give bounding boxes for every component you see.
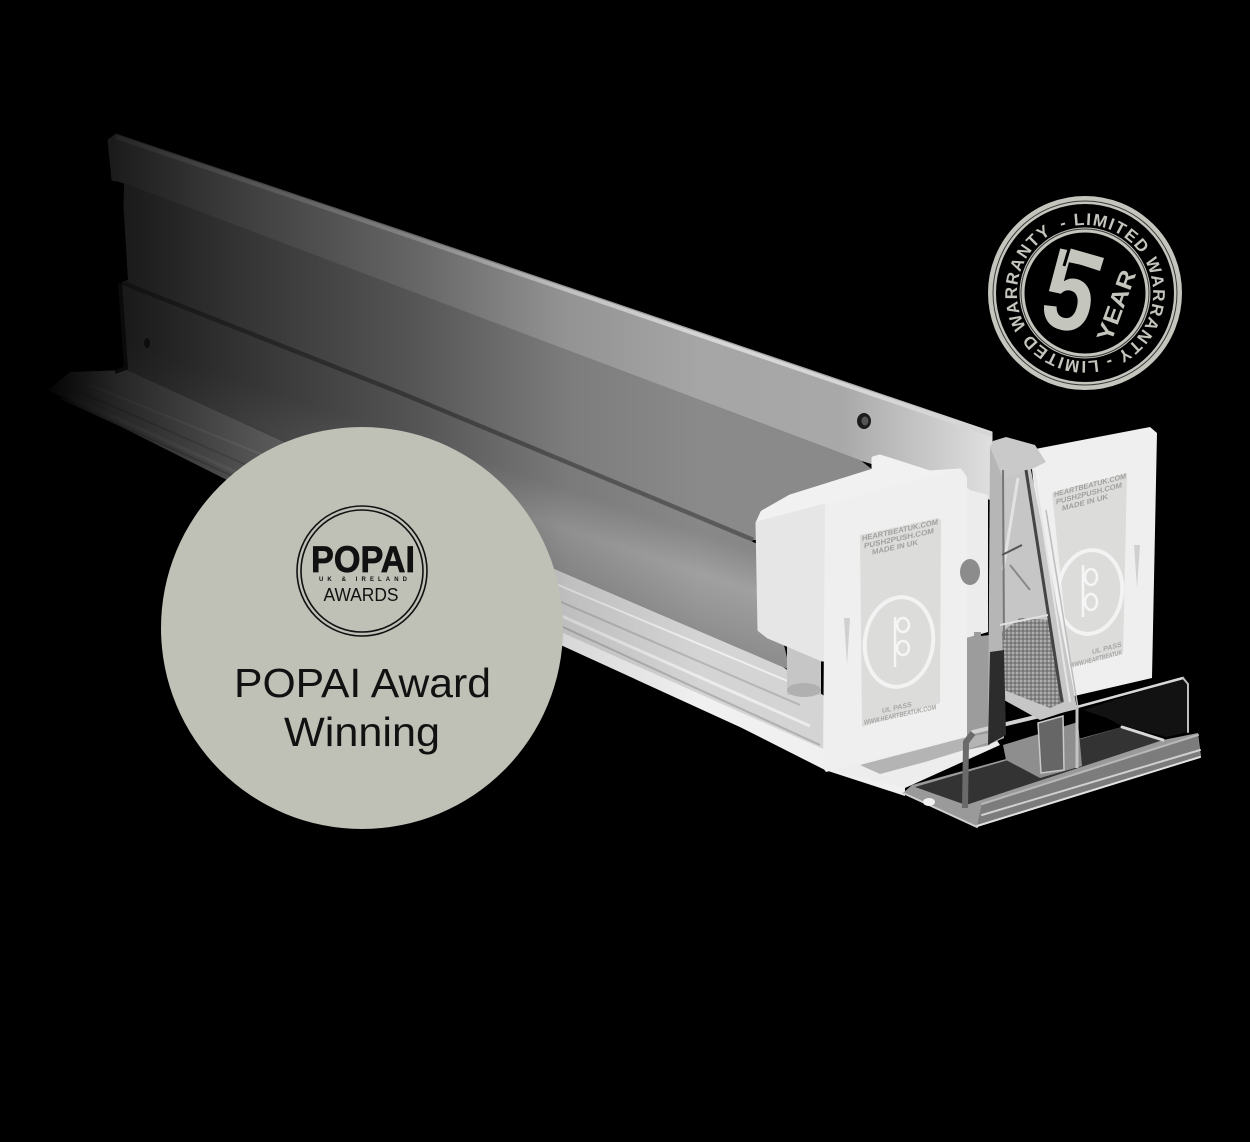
right panel printed text bottom [1070,640,1123,670]
right panel printed text top: HEARTBEATUK.COM [1054,471,1126,499]
logo outer ring [297,506,427,636]
tray rails [903,678,1200,827]
right panel printed text top: MADE IN UK [1062,492,1109,513]
rail back strip [108,134,992,500]
clear tray [903,678,1201,827]
rail channel shadow line [122,283,753,540]
left panel circle logo [859,593,939,691]
tray outer body [903,727,1201,827]
right panel printed text bottom: WWW.HEARTBEATUK [1070,648,1123,670]
right panel printed text top: PUSH2PUSH.COM [1056,480,1122,506]
badge circular text: - LIMITED WARRANTY - LIMITED WARRANTY [1005,213,1165,373]
right panel arrow [1134,545,1140,588]
logo AWARDS: AWARDS [324,585,398,605]
product: shelf pusher rail [0,100,992,796]
right panel printed text bottom: UL PASS [1092,641,1122,656]
left panel printed text top: MADE IN UK [872,538,919,557]
pusher base holder [1038,716,1064,773]
left panel arrow [844,618,850,665]
tray dark floor [915,727,1163,805]
small screw hole [144,338,150,348]
left panel inset [860,518,941,727]
badge YEAR: YEAR [1091,266,1141,345]
left panel plate [823,470,967,772]
badge inner ring [1022,230,1148,356]
logo inner ring [301,510,423,632]
left panel printed text bottom: WWW.HEARTBEATUK.COM [864,703,936,727]
left panel printed text top: PUSH2PUSH.COM [864,526,934,551]
award title line 1: POPAI Award [234,660,491,706]
body side face [757,505,825,660]
left end bracket [115,283,126,372]
body top face [757,456,960,530]
pusher white body [757,456,960,697]
rail white front lip [48,390,905,796]
post foot [787,683,821,697]
pusher struts [1000,470,1078,708]
logo POPAI wordmark: POPAI [311,539,415,580]
left panel printed text top [862,517,938,559]
pusher left column [988,447,1004,745]
right panel printed text top [1054,471,1126,515]
rail lower channel [122,285,790,670]
tray bright corner [923,798,935,806]
tray clear middle section [1003,722,1082,778]
left panel printed text bottom: UL PASS [882,701,912,715]
clear central pusher [988,437,1078,773]
POPAI logo [297,506,427,636]
badge ring path [1017,225,1153,361]
right panel logo mark [1083,565,1097,617]
rail strip highlight [116,137,992,435]
left divider panel [823,470,1000,788]
badge outer ring [992,200,1178,386]
logo UK and Ireland: UK & IRELAND [319,577,408,583]
badge number 5: 5 [1032,223,1108,358]
right panel circle logo [1052,546,1128,638]
grey hole [960,559,980,585]
warranty badge [988,196,1182,390]
floor stripes [60,385,820,745]
badge top bar of the 5 [1066,248,1104,271]
notched panel extension [960,485,988,638]
pusher base upright [1076,707,1078,768]
rail upper channel [122,183,873,540]
pusher glitter reservoir [1002,618,1064,708]
badge inner ring line [1021,229,1149,357]
rail fixing screw [857,413,871,429]
left end fade [0,100,700,700]
support post [787,640,821,695]
tray upright [965,733,973,808]
white base behind panel foot [826,730,1000,788]
award circle [161,427,563,829]
award title line 2: Winning [284,709,440,755]
grey lower section [967,632,990,750]
pusher cap [990,437,1046,478]
badge outer ring line [993,201,1177,385]
circle background [161,427,563,829]
badge stencil cut [1064,246,1070,266]
left panel printed text top: HEARTBEATUK.COM [862,517,938,543]
left panel logo mark [895,617,909,667]
rail dark end slot [116,181,128,282]
right panel plate [1030,427,1157,697]
tray front band [977,735,1200,826]
right panel inset [1052,473,1127,667]
pusher triangle [1003,465,1077,720]
tray back plate [1083,678,1188,737]
pusher dark column [988,650,1006,745]
right divider panel [1030,427,1157,697]
panel foot strip [860,733,990,774]
rail floor [48,370,830,770]
